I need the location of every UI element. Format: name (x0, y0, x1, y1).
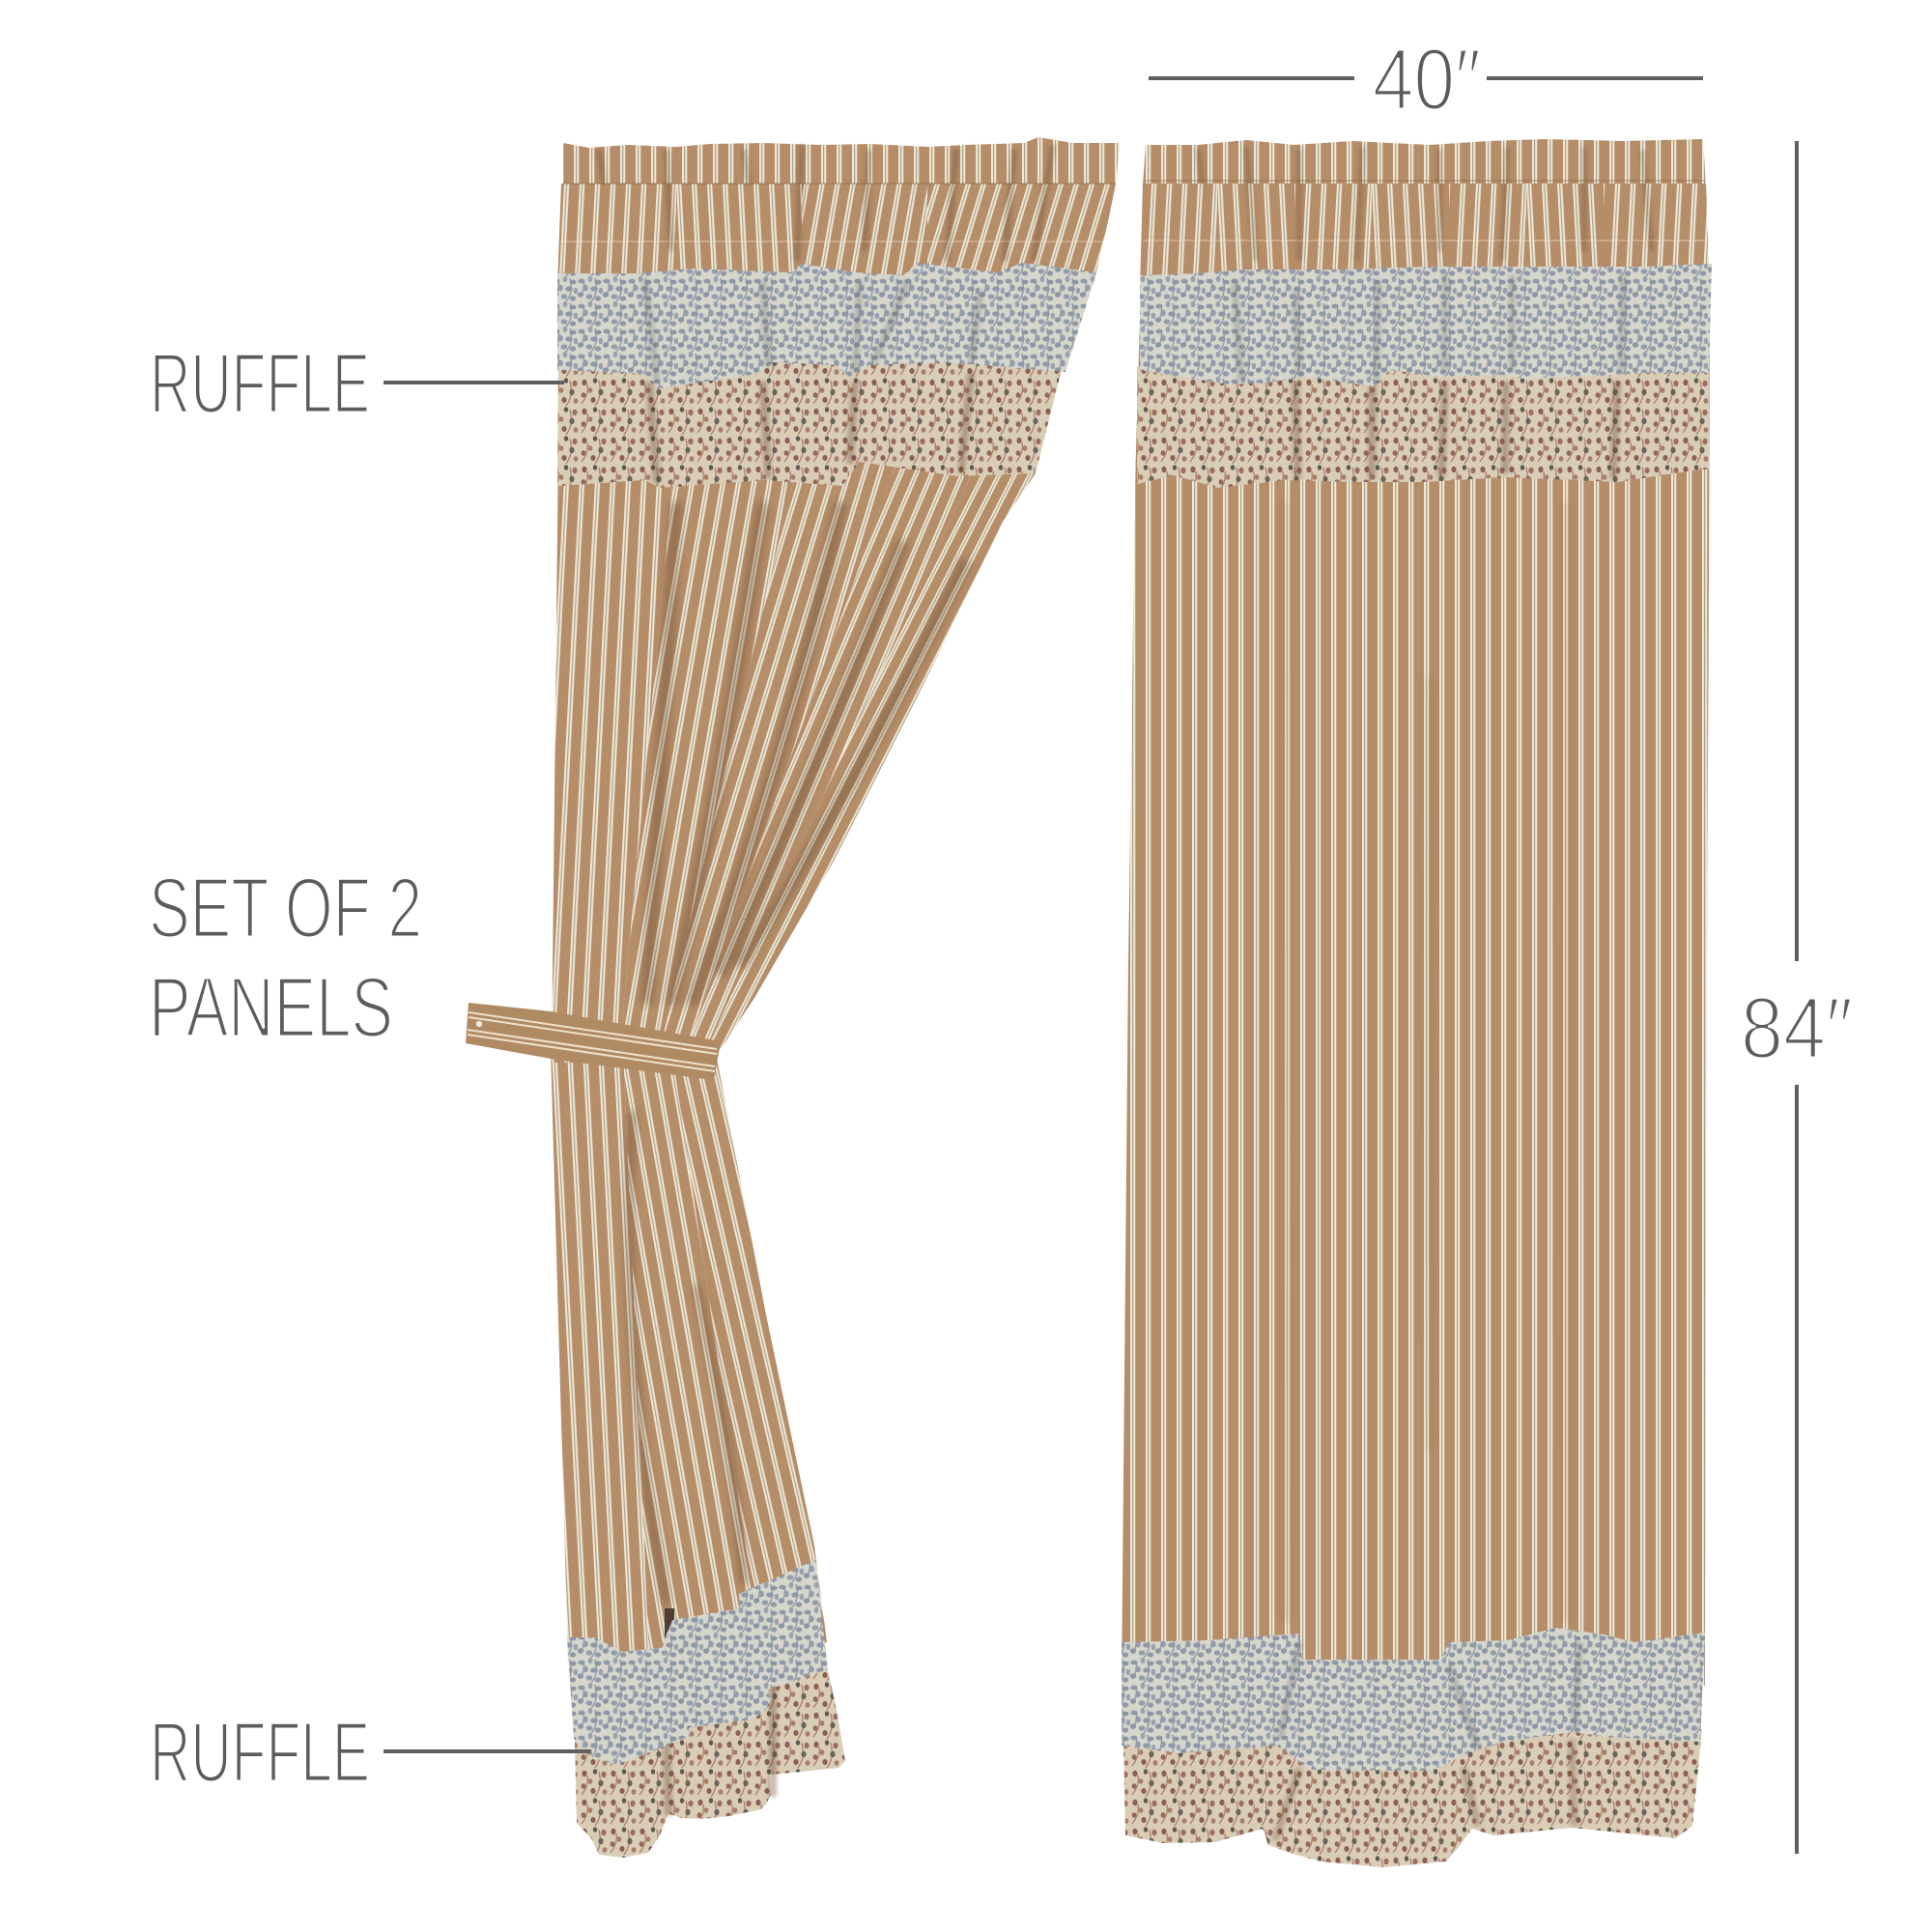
right panel: striped body (1122, 139, 1710, 1686)
left panel: striped body below tieback (551, 1048, 827, 1662)
left panel: lower floral ruffle blue (567, 1560, 828, 1765)
tieback button (476, 1021, 482, 1027)
right curtain panel (1122, 139, 1712, 1867)
left panel: rod pocket and heading (557, 137, 1120, 285)
left curtain panel (466, 137, 1120, 1858)
right panel: bottom floral ruffle beige (1123, 1729, 1702, 1867)
left panel: top floral ruffle blue (557, 263, 1096, 388)
text: set of 2 panels: PANELS (149, 959, 393, 1055)
callout: top ruffle: RUFFLE (150, 335, 370, 431)
right panel: top floral ruffle blue (1140, 264, 1712, 386)
dimension: 84 inch length (1741, 141, 1853, 1854)
right panel: top floral ruffle beige (1137, 362, 1709, 488)
right panel: bottom floral ruffle blue (1122, 1628, 1705, 1771)
right panel: rod pocket gathers (1143, 147, 1710, 261)
text: set of 2 panels: SET OF 2 (149, 860, 422, 955)
dimension: 40 inch width (1149, 32, 1703, 128)
dimension: 40 inch width: 40″ (1373, 32, 1481, 128)
text: set of 2 panels (149, 860, 422, 1055)
left panel: striped body above tieback (552, 444, 1036, 1063)
callout: bottom ruffle: RUFFLE (150, 1704, 370, 1800)
left panel: top floral ruffle beige (557, 357, 1065, 488)
tieback strap (466, 1003, 721, 1080)
left panel: lower floral ruffle hem (575, 1662, 845, 1858)
dimension: 84 inch length: 84″ (1741, 980, 1853, 1077)
